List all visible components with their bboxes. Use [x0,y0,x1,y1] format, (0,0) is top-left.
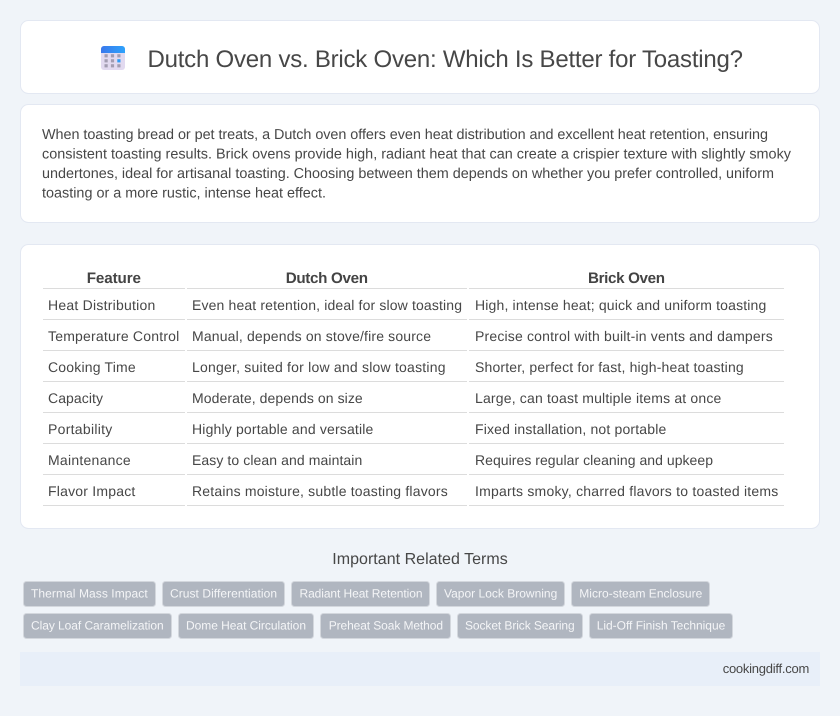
tags: related terms: Socket Brick Searing [465,618,575,632]
text block: introduction paragraph: toasting or a more rustic, intense heat effect. [42,186,326,202]
row: cooking time [48,359,744,375]
row: portability: Portability [48,421,112,437]
title: Dutch Oven vs. Brick Oven: Which Is Better for Toasting? [148,46,743,73]
row: capacity: Moderate, depends on size [192,390,363,406]
footer: cookingdiff.com [723,661,809,676]
table header row: Brick Oven [588,270,665,287]
row: portability: Highly portable and versatile [192,421,374,437]
row: cooking time: Longer, suited for low and slow toasting [192,359,446,375]
table header row [87,270,665,287]
tags: related terms: Thermal Mass Impact [31,586,148,600]
text block: introduction paragraph: consistent toasting results. Brick ovens provide high, radiant heat that can create a crispier texture with slightly smoky [42,146,792,162]
tags: related terms: Radiant Heat Retention [300,586,422,600]
row: flavor impact: Retains moisture, subtle toasting flavors [192,483,448,499]
row: heat distribution: Heat Distribution [48,297,155,313]
row: temperature control: Temperature Control [48,328,179,344]
tags: related terms: Micro-steam Enclosure [579,586,703,600]
table header row: Feature [87,270,141,287]
row: heat distribution: Even heat retention, ideal for slow toasting [192,297,462,313]
row: heat distribution: High, intense heat; quick and uniform toasting [475,297,766,313]
row: capacity: Capacity [48,390,103,406]
tags: related terms: Vapor Lock Browning [444,586,557,600]
panel: comparison table [20,244,820,528]
icon: calendar [101,46,125,70]
row: capacity [48,390,722,406]
row: maintenance [48,452,713,468]
row: temperature control [48,328,773,344]
text block: introduction paragraph [42,127,792,202]
text block: introduction paragraph: undertones, ideal for artisanal toasting. Choosing between them depends on whether you prefer controlled, uniform [42,166,774,182]
row: heat distribution [48,297,766,313]
table header row: Dutch Oven [286,270,368,287]
tags: related terms [24,582,732,638]
tags: related terms: Crust Differentiation [170,586,277,600]
footer [20,652,820,686]
tags: related terms: Preheat Soak Method [329,618,443,632]
row: cooking time: Shorter, perfect for fast, high-heat toasting [475,359,744,375]
row: maintenance: Maintenance [48,452,131,468]
row: flavor impact [48,483,778,499]
panel: header [20,20,820,94]
heading: important related terms: Important Related Terms [332,551,508,568]
row: temperature control: Manual, depends on stove/fire source [192,328,431,344]
tags: related terms: Lid-Off Finish Technique [597,618,726,632]
tags: related terms: Clay Loaf Caramelization [31,618,164,632]
tags: related terms: Dome Heat Circulation [186,618,306,632]
panel: introduction [20,104,820,222]
row: maintenance: Requires regular cleaning and upkeep [475,452,713,468]
row: cooking time: Cooking Time [48,359,136,375]
row: portability [48,421,667,437]
row: flavor impact: Imparts smoky, charred flavors to toasted items [475,483,778,499]
row: maintenance: Easy to clean and maintain [192,452,362,468]
row: portability: Fixed installation, not portable [475,421,667,437]
row: temperature control: Precise control with built-in vents and dampers [475,328,773,344]
row: capacity: Large, can toast multiple items at once [475,390,722,406]
row: flavor impact: Flavor Impact [48,483,135,499]
text block: introduction paragraph: When toasting bread or pet treats, a Dutch oven offers even heat distribution and excellent heat retention, ensuring [42,127,768,143]
